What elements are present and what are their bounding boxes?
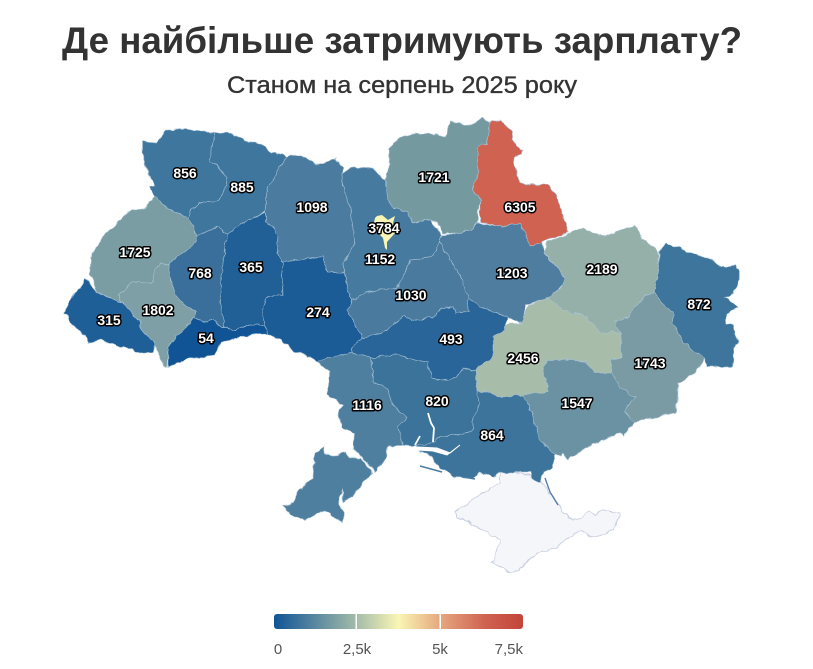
- legend labels: 2,5k: [343, 641, 372, 658]
- region: Kirovohrad 493: [352, 298, 507, 380]
- region: Rivne 885: [189, 132, 287, 236]
- region: Zakarpattia 315: [63, 279, 155, 353]
- region: Odesa 1116: [283, 353, 408, 523]
- legend: [274, 614, 523, 658]
- region: Lviv 1725: 1725: [119, 244, 151, 260]
- region: Dnipropetrovsk 2456: [475, 298, 622, 397]
- region: Donetsk 1743: 1743: [634, 355, 666, 371]
- region: Kirovohrad 493: 493: [439, 331, 463, 347]
- region: Kherson 864: [416, 390, 555, 482]
- region: Kyiv city 3784: 3784: [368, 220, 400, 236]
- region: Chernihiv 1721: [385, 119, 489, 233]
- region: Odesa 1116: 1116: [352, 397, 382, 413]
- estuaries: [415, 413, 460, 455]
- region: Kharkiv 2189: 2189: [586, 261, 618, 277]
- region: Luhansk 872: [655, 243, 740, 367]
- region: Poltava 1203: [440, 223, 565, 323]
- region: Kyiv oblast 1152: 1152: [365, 251, 395, 267]
- legend labels: 0: [274, 641, 282, 658]
- region: Kherson 864: 864: [480, 427, 504, 443]
- region: Cherkasy 1030: 1030: [395, 287, 427, 303]
- region: Dnipropetrovsk 2456: 2456: [507, 350, 539, 366]
- region: Zhytomyr 1098: [265, 155, 355, 273]
- map of Ukraine by oblast: [63, 119, 740, 572]
- region: Khmelnytskyi 365: 365: [239, 259, 263, 275]
- region: Chernivtsi 54: 54: [198, 330, 214, 346]
- region: Chernivtsi 54: [168, 318, 267, 367]
- region: Vinnytsia 274: [263, 257, 362, 362]
- region: Vinnytsia 274: 274: [306, 304, 330, 320]
- region: Volyn 856: 856: [173, 165, 197, 181]
- Kinburn and Tendra spits: [420, 466, 475, 479]
- subtitle: Станом на серпень 2025 року: [227, 72, 577, 99]
- region: Sumy 6305: 6305: [504, 199, 536, 215]
- region: Cherkasy 1030: [348, 242, 468, 338]
- region: Ivano-Frankivsk 1802: [120, 263, 197, 367]
- region: Volyn 856: [142, 129, 227, 219]
- region: Khmelnytskyi 365: [220, 213, 283, 330]
- region: Poltava 1203: 1203: [496, 265, 528, 281]
- region: Rivne 885: 885: [230, 179, 254, 195]
- region: Ivano-Frankivsk 1802: 1802: [142, 302, 174, 318]
- region: Mykolaiv 820: 820: [425, 393, 449, 409]
- region: Lviv 1725: [90, 197, 197, 303]
- Arabat spit: [545, 478, 558, 505]
- region: Kharkiv 2189: [543, 225, 659, 333]
- region: Kyiv city 3784: [368, 215, 400, 250]
- region: Ternopil 768: [168, 227, 227, 327]
- region: Luhansk 872: 872: [687, 296, 711, 312]
- region: Donetsk 1743: [611, 292, 705, 422]
- region: Zhytomyr 1098: 1098: [296, 199, 328, 215]
- legend labels: 7,5k: [495, 641, 523, 658]
- region: Chernihiv 1721: 1721: [418, 169, 450, 185]
- region: Zaporizhzhia 1547: 1547: [561, 395, 593, 411]
- region: Mykolaiv 820: [370, 355, 480, 446]
- region: Crimea (no data): [455, 468, 620, 572]
- region: Ternopil 768: 768: [188, 265, 212, 281]
- title: Де найбільше затримують зарплату?: [62, 19, 742, 61]
- legend labels: 5k: [432, 641, 448, 658]
- legend colour bar: [274, 614, 523, 629]
- region: Kyiv oblast 1152: [342, 167, 442, 300]
- region: Zaporizhzhia 1547: [522, 360, 635, 460]
- legend labels: [274, 641, 523, 658]
- region: Zakarpattia 315: 315: [97, 312, 121, 328]
- region: Sumy 6305: [473, 120, 568, 246]
